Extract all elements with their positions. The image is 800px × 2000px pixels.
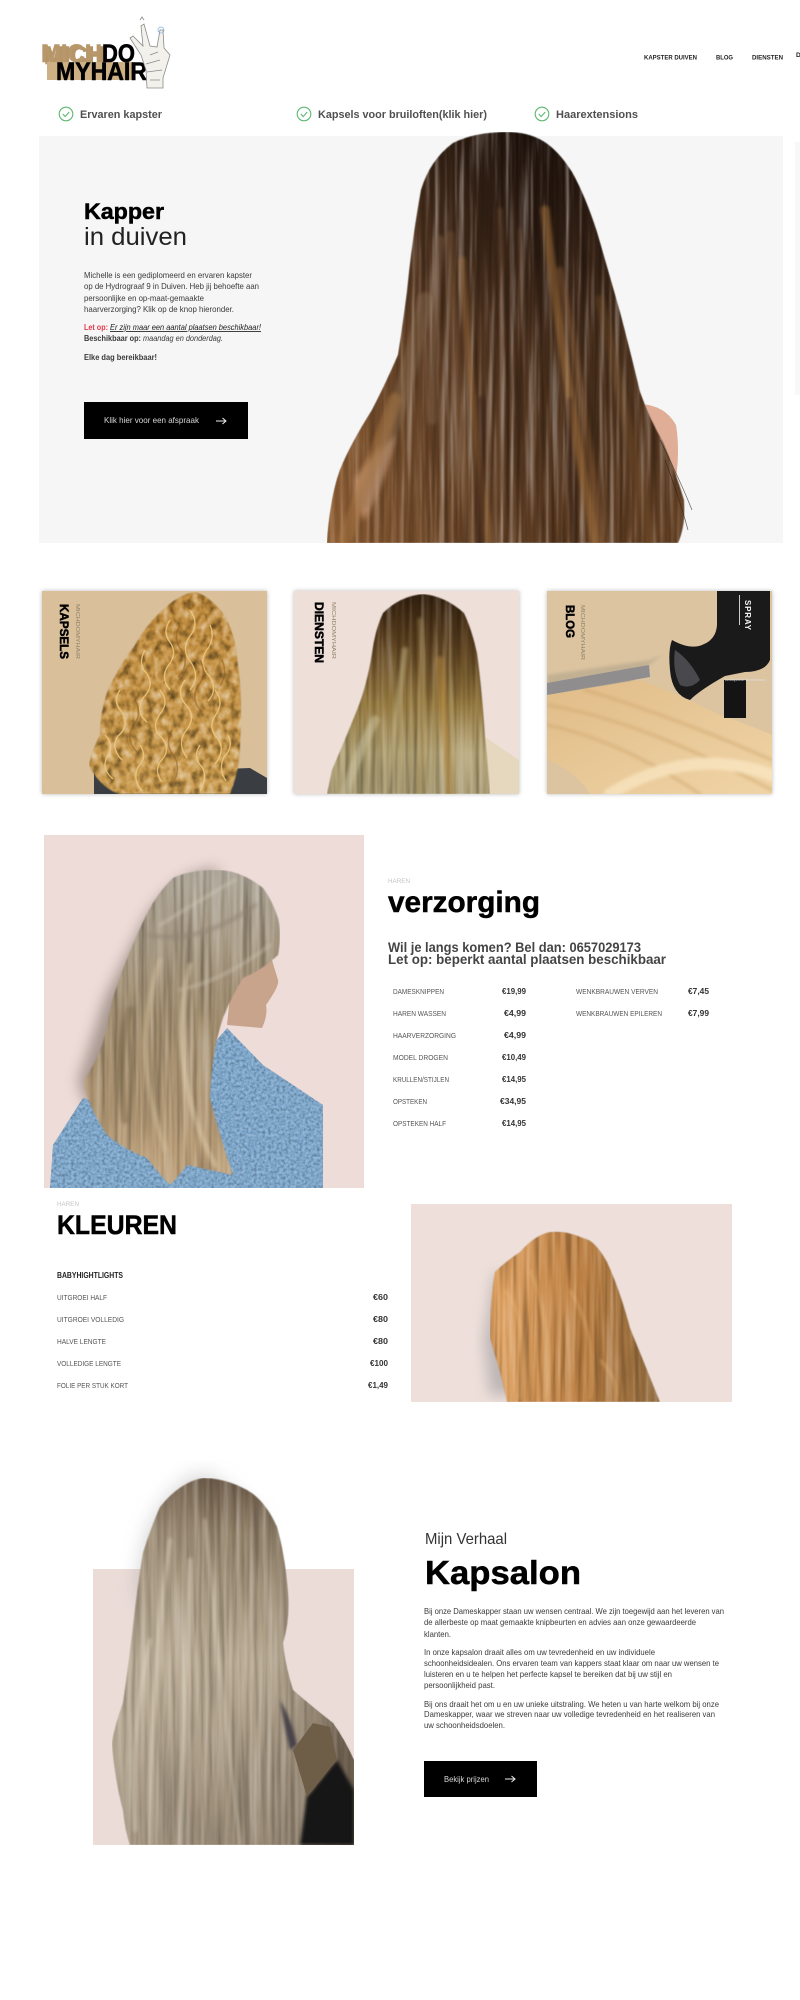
price list: verzorging: €4,99 xyxy=(504,1009,527,1018)
price list: verzorging: DAMESKNIPPEN xyxy=(393,987,444,996)
price list: kleuren: €60 xyxy=(373,1293,389,1302)
story text: schoonheidsidealen. Ons ervaren team van kappers staat klaar om naar uw wensen te xyxy=(424,1658,719,1668)
logo xyxy=(41,17,170,88)
heading: Kapsalon xyxy=(425,1554,581,1591)
card: blog: Developed for hair extensions xyxy=(725,678,765,682)
call to action: Let op: beperkt aantal plaatsen beschikbaar xyxy=(388,952,667,967)
navigation: KAPSTER DUIVEN xyxy=(644,54,697,62)
panel: hero xyxy=(39,132,783,543)
subheading: BABYHIGHTLIGHTS xyxy=(57,1271,124,1280)
button: prijzen: Bekijk prijzen xyxy=(444,1774,489,1784)
hero text: Elke dag bereikbaar! xyxy=(84,352,157,362)
price list: verzorging: €14,95 xyxy=(502,1119,527,1128)
hero text: haarverzorging? Klik op de knop hieronder. xyxy=(84,304,234,314)
card: diensten: MICHDOMYHAIR xyxy=(330,602,336,659)
photo: long brown hair from behind xyxy=(327,132,692,543)
icon: check xyxy=(297,107,311,121)
rotated label: DIENSTEN xyxy=(312,602,324,663)
feature list: Ervaren kapster xyxy=(80,109,163,121)
price list: kleuren: €80 xyxy=(373,1315,389,1324)
price list: verzorging: KRULLEN/STIJLEN xyxy=(393,1075,449,1084)
price list: verzorging: HAREN WASSEN xyxy=(393,1009,446,1018)
price list: verzorging: €7,45 xyxy=(688,987,710,996)
call to action: Wil je langs komen? Bel dan: 0657029173 xyxy=(388,940,641,955)
price list: kleuren: HALVE LENGTE xyxy=(57,1337,106,1346)
price list: verzorging: €19,99 xyxy=(502,987,527,996)
heading: KLEUREN xyxy=(57,1210,177,1240)
price list: kleuren: €100 xyxy=(370,1359,389,1368)
story text: klanten. xyxy=(424,1629,451,1639)
price list: verzorging: MODEL DROGEN xyxy=(393,1053,448,1062)
card: kapsels xyxy=(42,591,267,794)
price list: kleuren: €1,49 xyxy=(368,1381,389,1390)
price list: verzorging: OPSTEKEN xyxy=(393,1097,427,1106)
card: blog: MICHDOMYHAIR xyxy=(579,605,585,660)
feature list: Haarextensions xyxy=(556,109,638,121)
price list: verzorging: €7,99 xyxy=(688,1009,710,1018)
logo: MICH xyxy=(41,40,102,68)
navigation: DIENSTEN xyxy=(752,54,783,62)
price list: verzorging: WENKBRAUWEN EPILEREN xyxy=(576,1009,662,1018)
price list: verzorging: OPSTEKEN HALF xyxy=(393,1119,447,1128)
icon: hand with scissors xyxy=(130,17,170,88)
panel: kapsalon photo xyxy=(93,1476,354,1845)
price list: verzorging: €34,95 xyxy=(500,1097,527,1106)
section: verzorging text xyxy=(388,878,710,1128)
card: blog xyxy=(547,591,772,794)
logo: MICH xyxy=(44,42,105,70)
icon: arrow xyxy=(505,1776,515,1782)
story text: uw schoonheidsdoelen. xyxy=(424,1720,505,1730)
heading: Kapper xyxy=(84,199,164,224)
story text: persoonlijkheid past. xyxy=(424,1680,495,1690)
price list: verzorging: WENKBRAUWEN VERVEN xyxy=(576,987,658,996)
icon: check xyxy=(535,107,549,121)
story text: Bij onze Dameskapper staan uw wensen centraal. We zijn toegewijd aan het leveren van xyxy=(424,1606,724,1616)
price list: kleuren: VOLLEDIGE LENGTE xyxy=(57,1359,121,1368)
price list: verzorging xyxy=(393,987,710,1128)
hero text: Beschikbaar op: xyxy=(84,333,141,343)
section: kleuren text xyxy=(57,1201,389,1390)
heading: verzorging xyxy=(388,886,540,919)
story text: luisteren en u te helpen het perfecte kapsel te bereiken dat bij uw stijl en xyxy=(424,1669,672,1679)
story text: Dameskapper, waar we streven naar uw volledige tevredenheid en het realiseren van xyxy=(424,1709,715,1719)
rotated label: KAPSELS xyxy=(57,604,69,659)
feature list xyxy=(59,107,638,121)
navigation xyxy=(644,52,800,62)
price list: verzorging: €10,49 xyxy=(502,1053,527,1062)
price list: verzorging: €14,95 xyxy=(502,1075,527,1084)
hero text: maandag en donderdag. xyxy=(143,333,223,343)
section: kapsalon text xyxy=(424,1531,724,1797)
call to action xyxy=(388,940,667,967)
button: prijzen xyxy=(424,1761,537,1797)
heading xyxy=(84,199,187,251)
hero text: Er zijn maar een aantal plaatsen beschikbaar! xyxy=(110,322,262,332)
icon: arrow xyxy=(216,418,226,424)
icon: check xyxy=(59,107,73,121)
panel: verzorging photo xyxy=(44,835,364,1188)
price list: verzorging: €4,99 xyxy=(504,1031,527,1040)
hero text: op de Hydrograaf 9 in Duiven. Heb jij behoefte aan xyxy=(84,281,259,291)
button: afspraak: Klik hier voor een afspraak xyxy=(104,415,200,425)
hero text: Michelle is een gediplomeerd en ervaren kapster xyxy=(84,270,252,280)
story text: de allerbeste op maat gemaakte knipbeurten en advies aan onze gewaardeerde xyxy=(424,1617,696,1627)
price list: verzorging: HAARVERZORGING xyxy=(393,1031,456,1040)
card: blog: SPRAY xyxy=(743,600,752,631)
price list: kleuren: UITGROEI HALF xyxy=(57,1293,108,1302)
section: kapsalon text: Mijn Verhaal xyxy=(425,1531,507,1548)
faint side panel xyxy=(795,142,800,395)
section: kleuren text: HAREN xyxy=(57,1201,79,1208)
logo: DO xyxy=(102,40,135,68)
button: afspraak xyxy=(84,402,248,439)
price list: kleuren xyxy=(57,1293,389,1390)
card: kapsels: MICHDOMYHAIR xyxy=(74,604,80,659)
heading: in duiven xyxy=(84,223,187,251)
story text: In onze kapsalon draait alles om uw tevredenheid en uw individuele xyxy=(424,1647,655,1657)
hero text xyxy=(84,270,262,362)
logo: MYHAIR xyxy=(56,58,147,86)
panel: kleuren photo xyxy=(411,1204,732,1402)
card: diensten xyxy=(294,591,519,794)
rotated label: BLOG xyxy=(563,605,575,638)
price list: kleuren: FOLIE PER STUK KORT xyxy=(57,1381,129,1390)
section: verzorging text: HAREN xyxy=(388,878,410,885)
feature list: Kapsels voor bruiloften(klik hier) xyxy=(318,109,487,121)
story text xyxy=(424,1606,724,1730)
navigation: BLOG xyxy=(716,54,733,62)
story text: Bij ons draait het om u en uw unieke uitstraling. We heten u van harte welkom bij onze xyxy=(424,1699,719,1709)
price list: kleuren: €80 xyxy=(373,1337,389,1346)
hero text: persoonlijke en op-maat-gemaakte xyxy=(84,293,204,303)
price list: kleuren: UITGROEI VOLLEDIG xyxy=(57,1315,124,1324)
hero text: Let op: xyxy=(84,322,108,332)
